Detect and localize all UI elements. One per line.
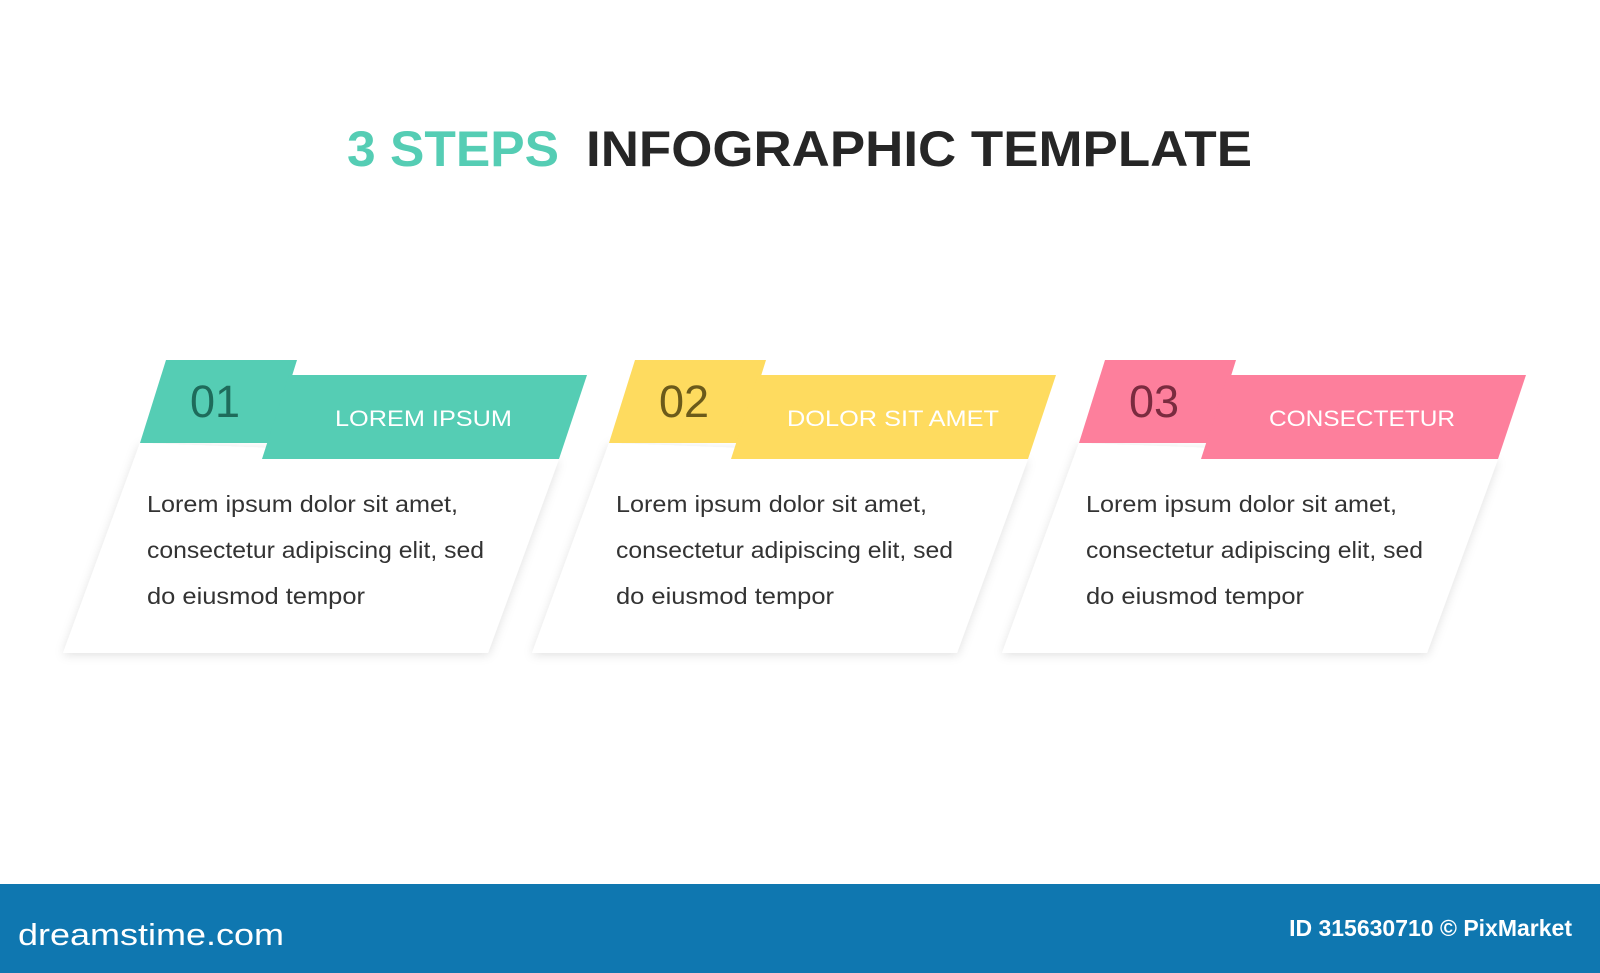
footer bar: ID 315630710 © PixMarket <box>1289 915 1572 941</box>
footer bar <box>0 884 1600 973</box>
body text 2: Lorem ipsum dolor sit amet, <box>616 491 927 517</box>
body text 2: consectetur adipiscing elit, sed <box>616 537 953 563</box>
panel: step 3: 03 <box>1129 376 1179 427</box>
title <box>347 121 1252 177</box>
body text 3: do eiusmod tempor <box>1086 583 1304 609</box>
body text 2: do eiusmod tempor <box>616 583 834 609</box>
panel: step 1 <box>63 360 587 653</box>
title: 3 STEPS <box>347 121 559 177</box>
title: INFOGRAPHIC TEMPLATE <box>586 121 1252 177</box>
number tab 3 <box>1079 360 1236 443</box>
number tab 2 <box>609 360 766 443</box>
body text 1: Lorem ipsum dolor sit amet, <box>147 491 458 517</box>
card 3 <box>1002 443 1498 653</box>
panel: step 2 <box>532 360 1056 653</box>
card 1 <box>63 443 559 653</box>
body text 3: consectetur adipiscing elit, sed <box>1086 537 1423 563</box>
card 2 <box>532 443 1028 653</box>
panel: step 1: LOREM IPSUM <box>335 406 512 431</box>
body text 1: do eiusmod tempor <box>147 583 365 609</box>
panel: step 3 <box>1002 360 1526 653</box>
label ribbon 2 <box>731 375 1056 459</box>
panel: step 2: DOLOR SIT AMET <box>787 406 999 431</box>
body text 1: consectetur adipiscing elit, sed <box>147 537 484 563</box>
body text 1 <box>147 491 484 609</box>
panel: step 3: CONSECTETUR <box>1269 406 1455 431</box>
label ribbon 1 <box>262 375 587 459</box>
body text 3 <box>1086 491 1423 609</box>
footer bar: dreamstime.com <box>18 917 284 952</box>
label ribbon 3 <box>1201 375 1526 459</box>
number tab 1 <box>140 360 297 443</box>
panel: step 2: 02 <box>659 376 709 427</box>
panel: step 1: 01 <box>190 376 240 427</box>
body text 2 <box>616 491 953 609</box>
body text 3: Lorem ipsum dolor sit amet, <box>1086 491 1397 517</box>
